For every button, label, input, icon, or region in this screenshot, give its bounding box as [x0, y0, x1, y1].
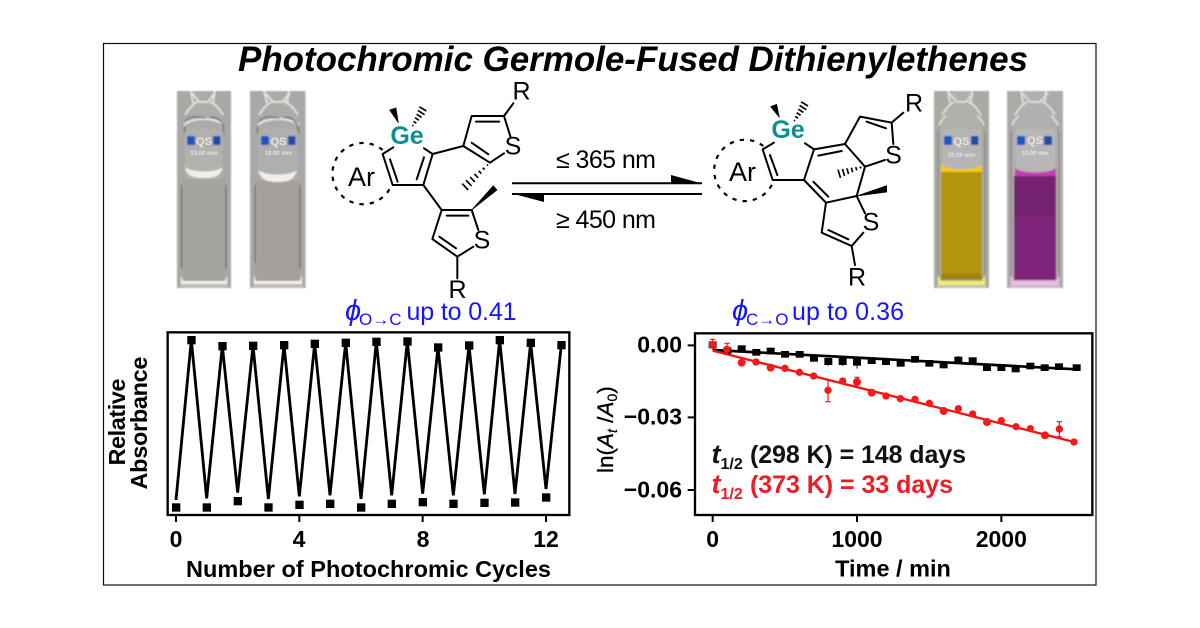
open-form molecule [332, 78, 531, 304]
quantum yield: ring closing: ϕ [345, 295, 361, 327]
substituent labels [848, 90, 923, 292]
germanium label: Ge [771, 116, 805, 144]
half-life annotation 298 K: t [712, 439, 722, 469]
cuvette label: 10.00 mm [1021, 151, 1049, 157]
plot frame [695, 333, 1092, 515]
cuvette label [190, 136, 218, 157]
photo: colourless cuvette 1 [177, 91, 231, 288]
half-life annotation 373 K [712, 469, 953, 503]
x tick labels: 2000 [976, 526, 1027, 552]
x tick labels: 1000 [831, 526, 883, 552]
cuvette label: 10.00 mm [265, 151, 292, 157]
half-life annotation 298 K: (298 K) = 148 days [750, 441, 966, 469]
quantum yield: ring closing [345, 295, 516, 329]
y axis title: Absorbance [126, 356, 152, 490]
substituent labels: S [505, 132, 521, 160]
quantum yield: ring closing: up to 0.41 [406, 298, 516, 326]
quantum yield: ring opening: up to 0.36 [792, 298, 904, 326]
aryl label: Ar [729, 157, 756, 187]
y axis title: ) [593, 386, 618, 394]
y axis title: ln(A [593, 433, 618, 473]
x tick labels: 8 [417, 526, 430, 552]
title: Photochromic Germole-Fused Dithienylethenes [238, 40, 1028, 79]
aryl label: Ar [348, 162, 375, 192]
quantum yield: ring opening: ϕ [732, 295, 748, 327]
half-life annotation 298 K: 1/2 [720, 456, 743, 473]
substituent labels: S [474, 226, 490, 254]
half-life annotation 298 K [712, 439, 966, 473]
outer frame [104, 44, 1096, 585]
x tick labels [170, 526, 559, 552]
cycling trace [176, 340, 561, 500]
y axis title [104, 356, 152, 490]
substituent labels: R [448, 276, 467, 304]
x axis title: Time / min [835, 556, 951, 582]
quantum yield: ring opening: C→O [746, 310, 788, 329]
substituent labels [448, 78, 531, 304]
x axis title: Number of Photochromic Cycles [186, 556, 551, 582]
y axis title: Relative [104, 378, 130, 466]
cuvette label: QS [271, 136, 286, 148]
cuvette label: 10.00 mm [190, 151, 218, 157]
photo: colourless cuvette 2 [250, 91, 306, 288]
data markers [172, 336, 566, 512]
y axis title: 0 [604, 394, 620, 402]
chart: thermal stability [593, 332, 1092, 582]
quantum yield: ring closing: O→C [359, 310, 402, 329]
photo: purple cuvette [1007, 91, 1063, 288]
substituent labels: R [848, 264, 866, 292]
half-life annotation 373 K: 1/2 [720, 486, 743, 503]
y tick labels: −0.06 [624, 476, 682, 502]
quantum yield: ring opening [732, 295, 904, 329]
plot frame [168, 332, 569, 515]
y axis title: A [593, 402, 618, 419]
cuvette label: QS [196, 136, 212, 148]
half-life annotation 373 K: t [712, 469, 722, 499]
half-life annotation 373 K: (373 K) = 33 days [750, 471, 953, 499]
photo: yellow cuvette [934, 91, 989, 288]
y axis title: t [604, 428, 620, 433]
equilibrium arrows [512, 146, 702, 234]
germanium label: Ge [390, 122, 424, 150]
closed-form molecule [714, 90, 923, 292]
cuvette label [948, 136, 975, 159]
cuvette label: 10.00 mm [948, 153, 975, 159]
substituent labels: S [863, 208, 879, 236]
cuvette label [1021, 135, 1049, 157]
x tick labels: 0 [706, 526, 719, 552]
y tick labels [624, 332, 682, 502]
substituent labels: R [512, 78, 531, 106]
black series 298 K [709, 341, 1081, 372]
substituent labels: S [885, 142, 902, 170]
x tick labels: 0 [170, 526, 182, 552]
y tick labels: −0.03 [624, 404, 682, 430]
y axis title: / [593, 416, 618, 429]
cuvette label [265, 136, 292, 157]
cuvette label: QS [954, 136, 969, 148]
x tick labels: 12 [533, 526, 559, 552]
y tick labels: 0.00 [637, 332, 682, 358]
chart: photochromic cycling [104, 332, 569, 582]
cuvette label: QS [1027, 135, 1043, 147]
red series 373 K [709, 339, 1078, 446]
equilibrium arrows: ≥ 450 nm [556, 206, 656, 234]
substituent labels: R [905, 90, 923, 118]
x tick labels: 4 [293, 526, 306, 552]
x tick labels [706, 526, 1027, 552]
wavelength labels: ≤ 365 nm [556, 146, 656, 174]
